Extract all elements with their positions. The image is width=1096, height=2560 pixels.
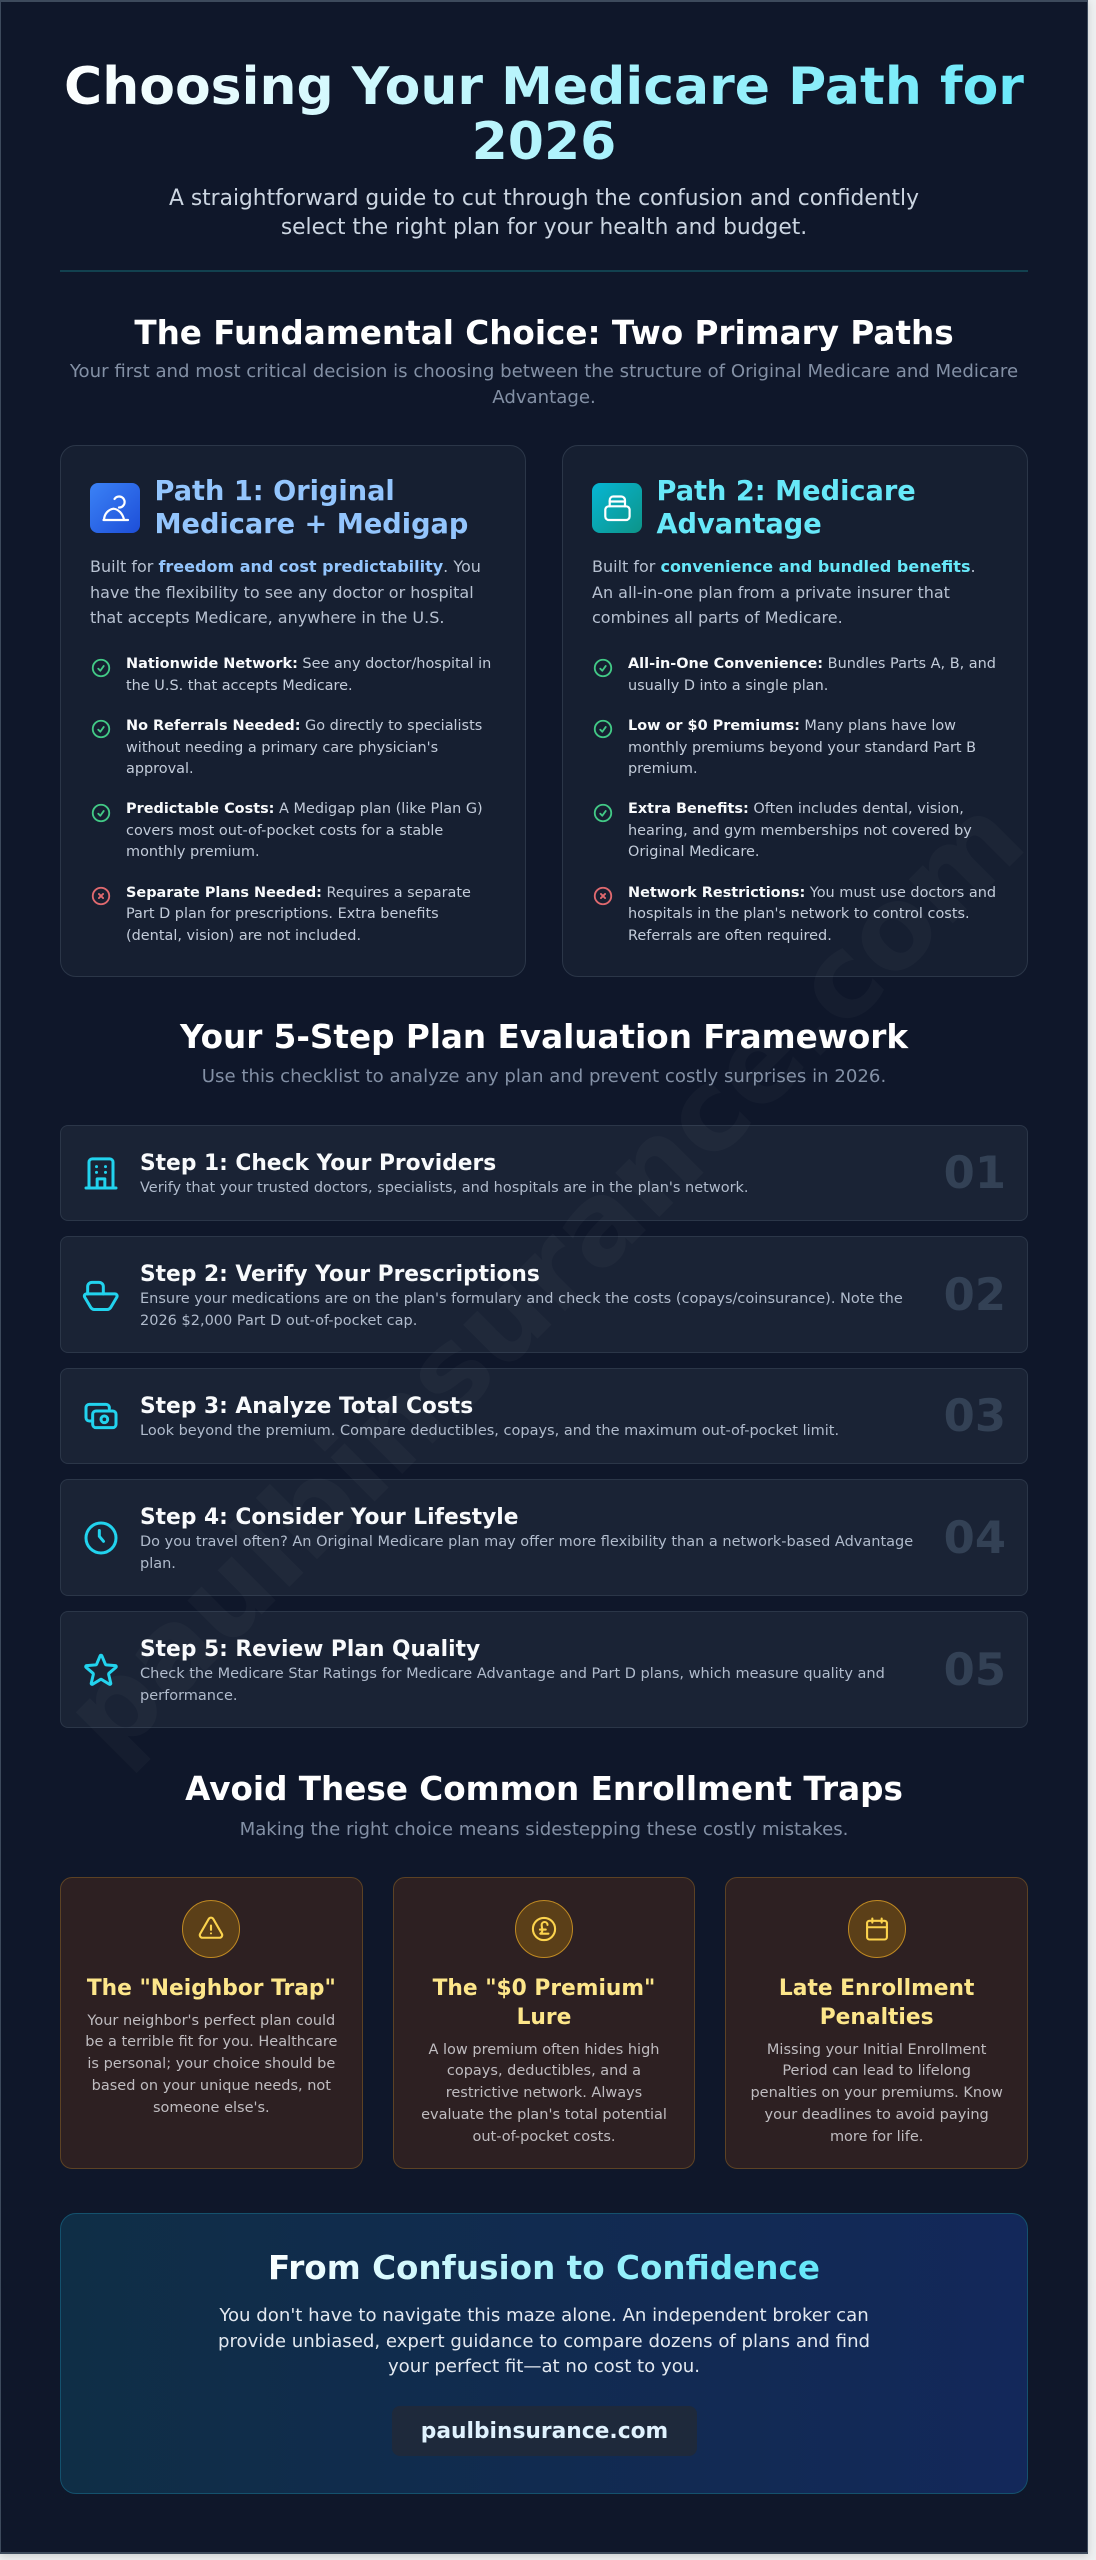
text: step 3 title: Step 3: Analyze Total Costs xyxy=(140,1394,473,1419)
icon: cash xyxy=(84,1402,118,1430)
text: premium lure detail: evaluate the plan's total potential xyxy=(421,2107,667,2123)
text: step 2 detail xyxy=(140,1291,903,1329)
text: neighbor trap detail: is personal; your choice should be xyxy=(87,2056,335,2072)
pro: extra benefits xyxy=(628,801,972,860)
panel: premium lure xyxy=(393,1877,695,2169)
text: late enrollment detail: penalties on your premiums. Know xyxy=(750,2085,1003,2101)
con: network restrictions xyxy=(628,884,996,944)
text: step 5 detail xyxy=(140,1666,885,1704)
pro: predictable costs xyxy=(126,801,483,860)
text: step 2 title: Step 2: Verify Your Prescriptions xyxy=(140,1262,540,1287)
icon: cross xyxy=(92,886,110,906)
text: step 4 detail: Do you travel often? An Original Medicare plan may offer more flexibility than a network-based Advantage xyxy=(140,1534,913,1550)
panel: path 1 original medicare xyxy=(60,445,526,977)
icon: check xyxy=(594,720,612,738)
icon: cross xyxy=(594,886,612,906)
heading: fundamental choice: The Fundamental Choice: Two Primary Paths xyxy=(134,314,954,352)
number 04: 04 xyxy=(944,1511,1006,1564)
pro: no referrals: without needing a primary care physician's xyxy=(126,740,438,756)
text: premium lure detail: A low premium often hides high xyxy=(428,2042,659,2058)
text: cta detail: your perfect fit—at no cost to you. xyxy=(388,2356,700,2377)
text: step 1 detail: Verify that your trusted doctors, specialists, and hospitals are in the plan's network. xyxy=(140,1180,749,1196)
pro: all in one: All-in-One Convenience: Bundles Parts A, B, and xyxy=(628,656,996,672)
divider xyxy=(60,270,1028,272)
text: step 2 detail: Ensure your medications are on the plan's formulary and check the costs (copays/coinsurance). Note the xyxy=(140,1291,903,1307)
icon: warning xyxy=(182,1900,240,1958)
title: Choosing Your Medicare Path for xyxy=(64,57,1024,117)
pro: extra benefits: hearing, and gym memberships not covered by xyxy=(628,823,972,839)
pro: all in one: usually D into a single plan. xyxy=(628,678,828,694)
text: late enrollment detail: your deadlines to avoid paying xyxy=(765,2107,989,2123)
pro: low premiums xyxy=(628,718,976,777)
text: cta detail: provide unbiased, expert guidance to compare dozens of plans and find xyxy=(218,2330,870,2352)
number 01: 01 xyxy=(944,1146,1006,1199)
icon: check xyxy=(92,658,110,678)
icon: calendar xyxy=(848,1900,906,1958)
pro: predictable costs: Predictable Costs: A Medigap plan (like Plan G) xyxy=(126,801,483,817)
text: path 1 description: have the flexibility to see any doctor or hospital xyxy=(90,583,474,602)
number 02: 02 xyxy=(944,1268,1006,1321)
icon: nurse xyxy=(90,483,140,533)
text: step 4 detail xyxy=(140,1534,913,1572)
text: late enrollment detail: Missing your Initial Enrollment xyxy=(767,2042,986,2058)
text: premium lure title xyxy=(432,1976,655,2030)
text: late enrollment title: Penalties xyxy=(820,2005,934,2030)
icon: clock xyxy=(84,1522,118,1554)
heading: path 2 xyxy=(656,476,916,540)
pro: no referrals xyxy=(126,718,482,777)
icon: check xyxy=(594,804,612,822)
pro: extra benefits: Extra Benefits: Often includes dental, vision, xyxy=(628,801,964,817)
button: website: paulbinsurance.com xyxy=(421,2419,668,2444)
con: network restrictions: hospitals in the plan's network to control costs. xyxy=(628,906,970,922)
con: separate plans: Part D plan for prescriptions. Extra benefits xyxy=(126,906,439,922)
text: fundamental choice subtitle: Advantage. xyxy=(492,387,596,408)
pro: nationwide network xyxy=(126,656,491,694)
icon: pound coin xyxy=(515,1900,573,1958)
title: 2026 xyxy=(472,112,616,172)
con: separate plans: Separate Plans Needed: Requires a separate xyxy=(126,884,471,900)
heading: path 1: Path 1: Original xyxy=(154,476,395,507)
text: neighbor trap detail: be a terrible fit for you. Healthcare xyxy=(85,2034,337,2050)
text: late enrollment title xyxy=(779,1976,974,2030)
text: step 5 detail: Check the Medicare Star Ratings for Medicare Advantage and Part D plans, which measure quality and xyxy=(140,1666,885,1682)
heading: path 1 xyxy=(154,476,468,540)
panel: step 4 xyxy=(60,1479,1028,1596)
text: late enrollment detail: more for life. xyxy=(830,2129,923,2145)
button: website xyxy=(392,2406,697,2456)
heading: framework: Your 5-Step Plan Evaluation Framework xyxy=(180,1018,908,1056)
panel: step 5 xyxy=(60,1611,1028,1728)
text: neighbor trap title: The "Neighbor Trap" xyxy=(87,1976,336,2001)
text: path 1 description xyxy=(90,557,481,627)
heading: cta xyxy=(61,2246,1027,2290)
text: path 2 description: combines all parts of Medicare. xyxy=(592,608,843,627)
text: step 3 detail: Look beyond the premium. Compare deductibles, copays, and the maximum out-of-pocket limit. xyxy=(140,1423,839,1439)
text: step 1 title: Step 1: Check Your Providers xyxy=(140,1151,496,1176)
text: premium lure title: The "$0 Premium" xyxy=(433,1976,655,2001)
panel: call to action xyxy=(60,2213,1028,2494)
pro: no referrals: No Referrals Needed: Go directly to specialists xyxy=(126,718,482,734)
text: cta detail: You don't have to navigate this maze alone. An independent broker can xyxy=(219,2305,869,2326)
text: step 5 detail: performance. xyxy=(140,1688,237,1704)
con: separate plans: (dental, vision) are not included. xyxy=(126,928,361,944)
text: path 1 description: Built for freedom and cost predictability. You xyxy=(90,557,481,576)
text: neighbor trap detail xyxy=(85,2012,337,2116)
pro: low premiums: premium. xyxy=(628,761,698,777)
text: neighbor trap detail: based on your unique needs, not xyxy=(92,2078,331,2094)
icon: star xyxy=(84,1654,118,1686)
text: late enrollment detail: Period can lead to lifelong xyxy=(782,2063,971,2079)
panel: step 2 xyxy=(60,1236,1028,1353)
heading: path 2: Advantage xyxy=(656,509,822,540)
subtitle: select the right plan for your health and budget. xyxy=(281,215,807,240)
text: late enrollment title: Late Enrollment xyxy=(779,1976,974,2001)
text: path 2 description: An all-in-one plan from a private insurer that xyxy=(592,583,950,602)
title xyxy=(60,60,1028,170)
text: framework subtitle: Use this checklist to analyze any plan and prevent costly surprises in 2026. xyxy=(202,1066,886,1087)
text: step 4 detail: plan. xyxy=(140,1556,176,1572)
icon: bundle xyxy=(592,483,642,533)
text: neighbor trap detail: Your neighbor's perfect plan could xyxy=(87,2012,335,2028)
text: fundamental choice subtitle xyxy=(70,361,1018,408)
text: premium lure detail xyxy=(421,2042,667,2145)
pro: nationwide network: Nationwide Network: See any doctor/hospital in xyxy=(126,656,491,672)
con: network restrictions: Referrals are often required. xyxy=(628,928,832,944)
text: premium lure title: Lure xyxy=(517,2005,571,2030)
pro: predictable costs: covers most out-of-pocket costs for a stable xyxy=(126,823,443,839)
pro: no referrals: approval. xyxy=(126,761,194,777)
pro: all in one xyxy=(628,656,996,694)
watermark: paulbinsurance.com xyxy=(38,771,1049,1782)
panel: neighbor trap xyxy=(60,1877,363,2169)
text: cta detail xyxy=(218,2305,870,2377)
pro: predictable costs: monthly premium. xyxy=(126,844,260,860)
text: premium lure detail: out-of-pocket costs. xyxy=(472,2129,616,2145)
icon: check xyxy=(594,658,612,678)
panel: late enrollment xyxy=(725,1877,1028,2169)
text: late enrollment detail xyxy=(750,2042,1003,2145)
heading: path 2: Path 2: Medicare xyxy=(656,476,916,507)
text: premium lure detail: copays, deductibles, and a xyxy=(447,2063,641,2079)
subtitle: A straightforward guide to cut through the confusion and confidently xyxy=(169,186,919,210)
subtitle xyxy=(169,186,919,240)
panel: path 2 medicare advantage xyxy=(562,445,1028,977)
icon: check xyxy=(92,720,110,738)
text: path 2 description xyxy=(592,557,976,627)
panel: step 3 xyxy=(60,1368,1028,1464)
text: neighbor trap detail: someone else's. xyxy=(153,2100,270,2116)
text: premium lure detail: restrictive network. Always xyxy=(446,2085,642,2101)
heading: traps: Avoid These Common Enrollment Traps xyxy=(185,1770,903,1808)
text: step 5 title: Step 5: Review Plan Quality xyxy=(140,1637,480,1662)
pro: low premiums: monthly premiums beyond your standard Part B xyxy=(628,740,976,756)
icon: check xyxy=(92,804,110,822)
panel: step 1 xyxy=(60,1125,1028,1221)
text: traps subtitle: Making the right choice means sidestepping these costly mistakes. xyxy=(240,1819,848,1840)
text: step 2 detail: 2026 $2,000 Part D out-of-pocket cap. xyxy=(140,1313,417,1329)
text: step 4 title: Step 4: Consider Your Lifestyle xyxy=(140,1505,519,1530)
icon: building xyxy=(84,1157,118,1190)
text: fundamental choice subtitle: Your first and most critical decision is choosing between the structure of Original Medicare and Medicare xyxy=(70,361,1018,382)
heading: path 1: Medicare + Medigap xyxy=(154,509,468,540)
text: path 2 description: Built for convenience and bundled benefits. xyxy=(592,557,976,576)
con: separate plans xyxy=(126,884,471,944)
heading: cta: From Confusion to Confidence xyxy=(268,2248,820,2286)
icon: pill bowl xyxy=(82,1280,119,1311)
pro: nationwide network: the U.S. that accepts Medicare. xyxy=(126,678,353,694)
number 05: 05 xyxy=(944,1643,1006,1696)
pro: extra benefits: Original Medicare. xyxy=(628,844,759,860)
number 03: 03 xyxy=(944,1389,1006,1442)
pro: low premiums: Low or $0 Premiums: Many plans have low xyxy=(628,718,956,734)
con: network restrictions: Network Restrictions: You must use doctors and xyxy=(628,884,996,900)
text: path 1 description: that accepts Medicare, anywhere in the U.S. xyxy=(90,608,444,627)
